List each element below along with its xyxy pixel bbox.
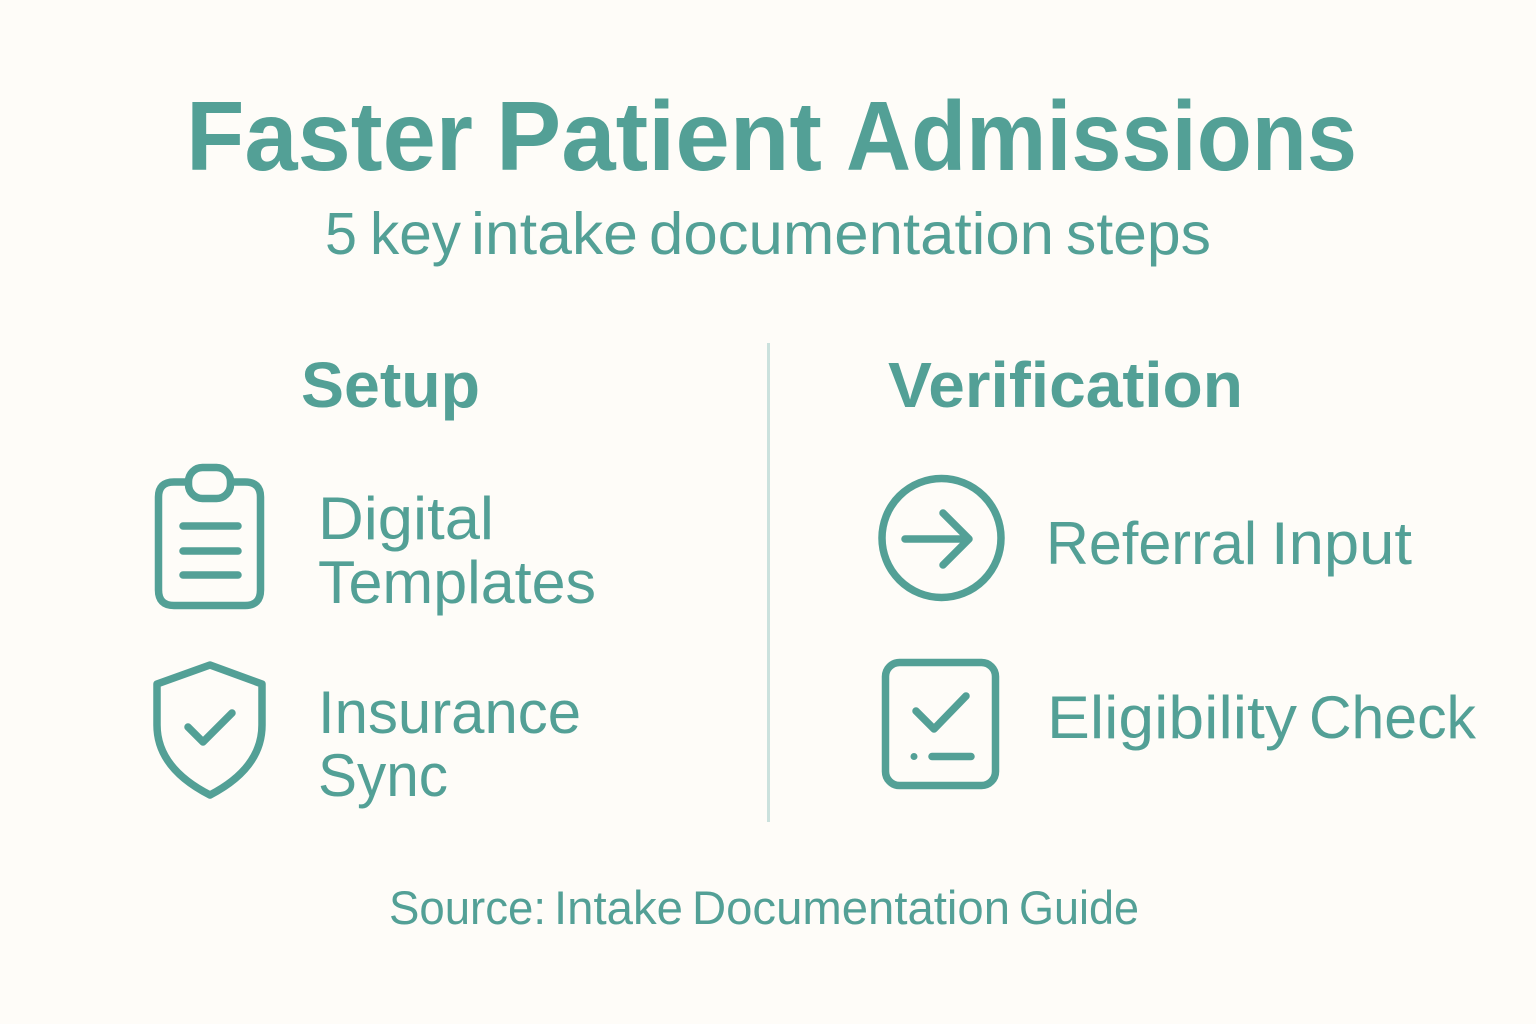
text: Referral Input xyxy=(1046,510,1412,577)
column divider xyxy=(767,343,770,822)
source note: Documentation xyxy=(692,881,1010,934)
text: Eligibility Check: Check xyxy=(1309,684,1477,751)
title: Patient xyxy=(496,81,822,191)
subtitle: 5 xyxy=(325,201,357,267)
icon: checklist box xyxy=(886,662,996,786)
icon: shield with check xyxy=(157,665,262,795)
text: Digital Templates: Digital xyxy=(318,485,494,552)
source note: Source: xyxy=(389,881,546,934)
text: Insurance Sync: Sync xyxy=(318,742,448,809)
text: Eligibility Check xyxy=(1047,684,1477,751)
text: Insurance Sync xyxy=(318,679,581,809)
icon: circled arrow xyxy=(882,478,1001,598)
subtitle: steps xyxy=(1066,201,1211,267)
icon: clipboard xyxy=(158,468,260,606)
text: Digital Templates xyxy=(318,485,596,616)
heading: Setup: Setup xyxy=(301,349,480,421)
subtitle: intake xyxy=(471,201,638,267)
title: Admissions xyxy=(846,81,1357,191)
text: Referral Input: Referral xyxy=(1046,510,1257,577)
text: Insurance Sync: Insurance xyxy=(318,679,581,746)
subtitle: key xyxy=(370,201,461,267)
text: Referral Input: Input xyxy=(1271,510,1412,577)
text: Digital Templates: Templates xyxy=(318,549,596,616)
subtitle xyxy=(325,201,1211,267)
text: Eligibility Check: Eligibility xyxy=(1047,684,1297,751)
source note xyxy=(389,881,1139,934)
source note: Intake xyxy=(554,881,683,934)
subtitle: documentation xyxy=(649,201,1054,267)
heading: Verification: Verification xyxy=(888,349,1243,421)
source note: Guide xyxy=(1019,881,1139,934)
title xyxy=(186,81,1357,191)
title: Faster xyxy=(186,81,473,191)
